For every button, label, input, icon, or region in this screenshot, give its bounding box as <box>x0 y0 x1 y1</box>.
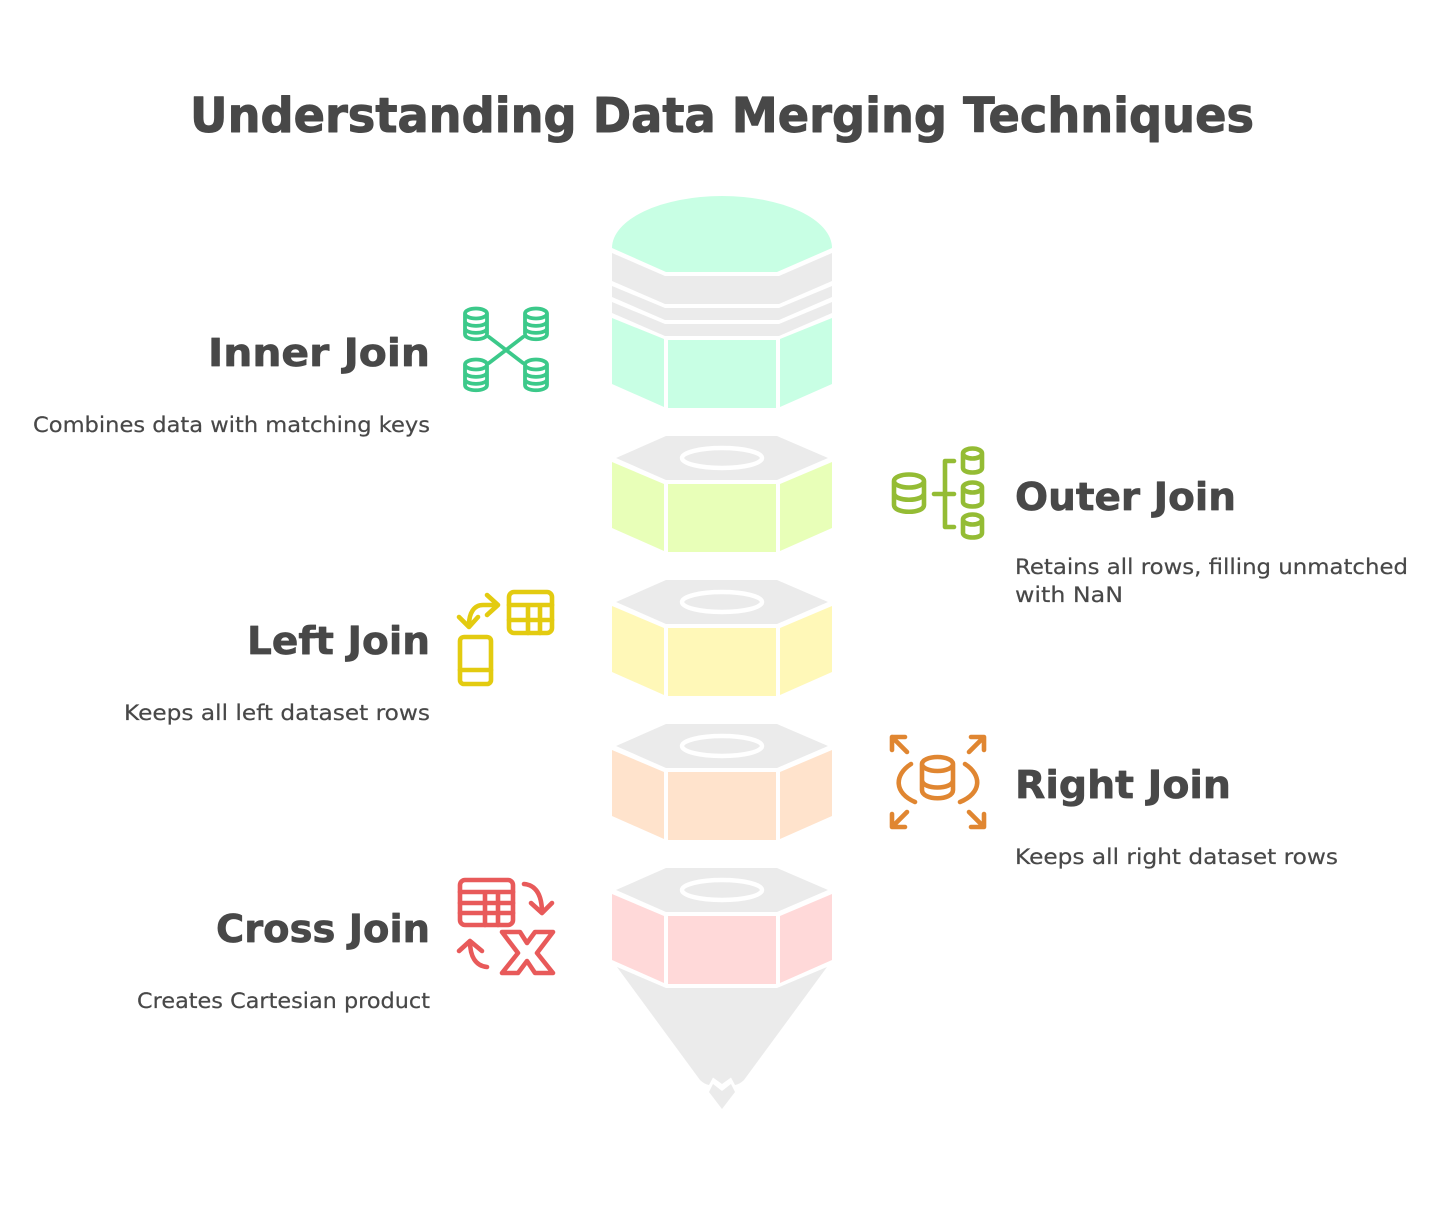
heading: Outer Join <box>1015 475 1236 519</box>
block: left join <box>124 592 552 725</box>
block: inner join <box>33 308 547 437</box>
heading: Inner Join <box>208 331 430 375</box>
description: Combines data with matching keys <box>33 413 430 437</box>
icon: table and device with arrow <box>459 592 552 684</box>
description: Creates Cartesian product <box>137 989 430 1013</box>
description: Keeps all right dataset rows <box>1015 845 1338 869</box>
segment: cross join <box>612 868 832 984</box>
segment: right join <box>612 724 832 840</box>
stacked cylinder diagram <box>612 196 832 1109</box>
description line 2: with NaN <box>1015 583 1123 607</box>
description: Keeps all left dataset rows <box>124 701 430 725</box>
icon: table, arrows and X <box>459 880 553 973</box>
segment: outer join <box>612 436 832 552</box>
block: right join <box>892 737 1338 869</box>
block: outer join <box>894 449 1408 607</box>
segment: bottom point <box>617 967 827 1109</box>
heading: Cross Join <box>216 907 430 951</box>
icon: database expanding <box>892 737 984 827</box>
heading: Right Join <box>1015 763 1231 807</box>
segment: left join <box>612 580 832 696</box>
icon: database to three databases <box>894 449 982 538</box>
icon: four databases crossed <box>465 308 547 390</box>
heading: Left Join <box>247 619 430 663</box>
segment: top cap (inner join) <box>612 196 832 408</box>
description: Retains all rows, filling unmatched <box>1015 555 1408 579</box>
block: cross join <box>137 880 553 1013</box>
title: Understanding Data Merging Techniques <box>190 88 1254 144</box>
